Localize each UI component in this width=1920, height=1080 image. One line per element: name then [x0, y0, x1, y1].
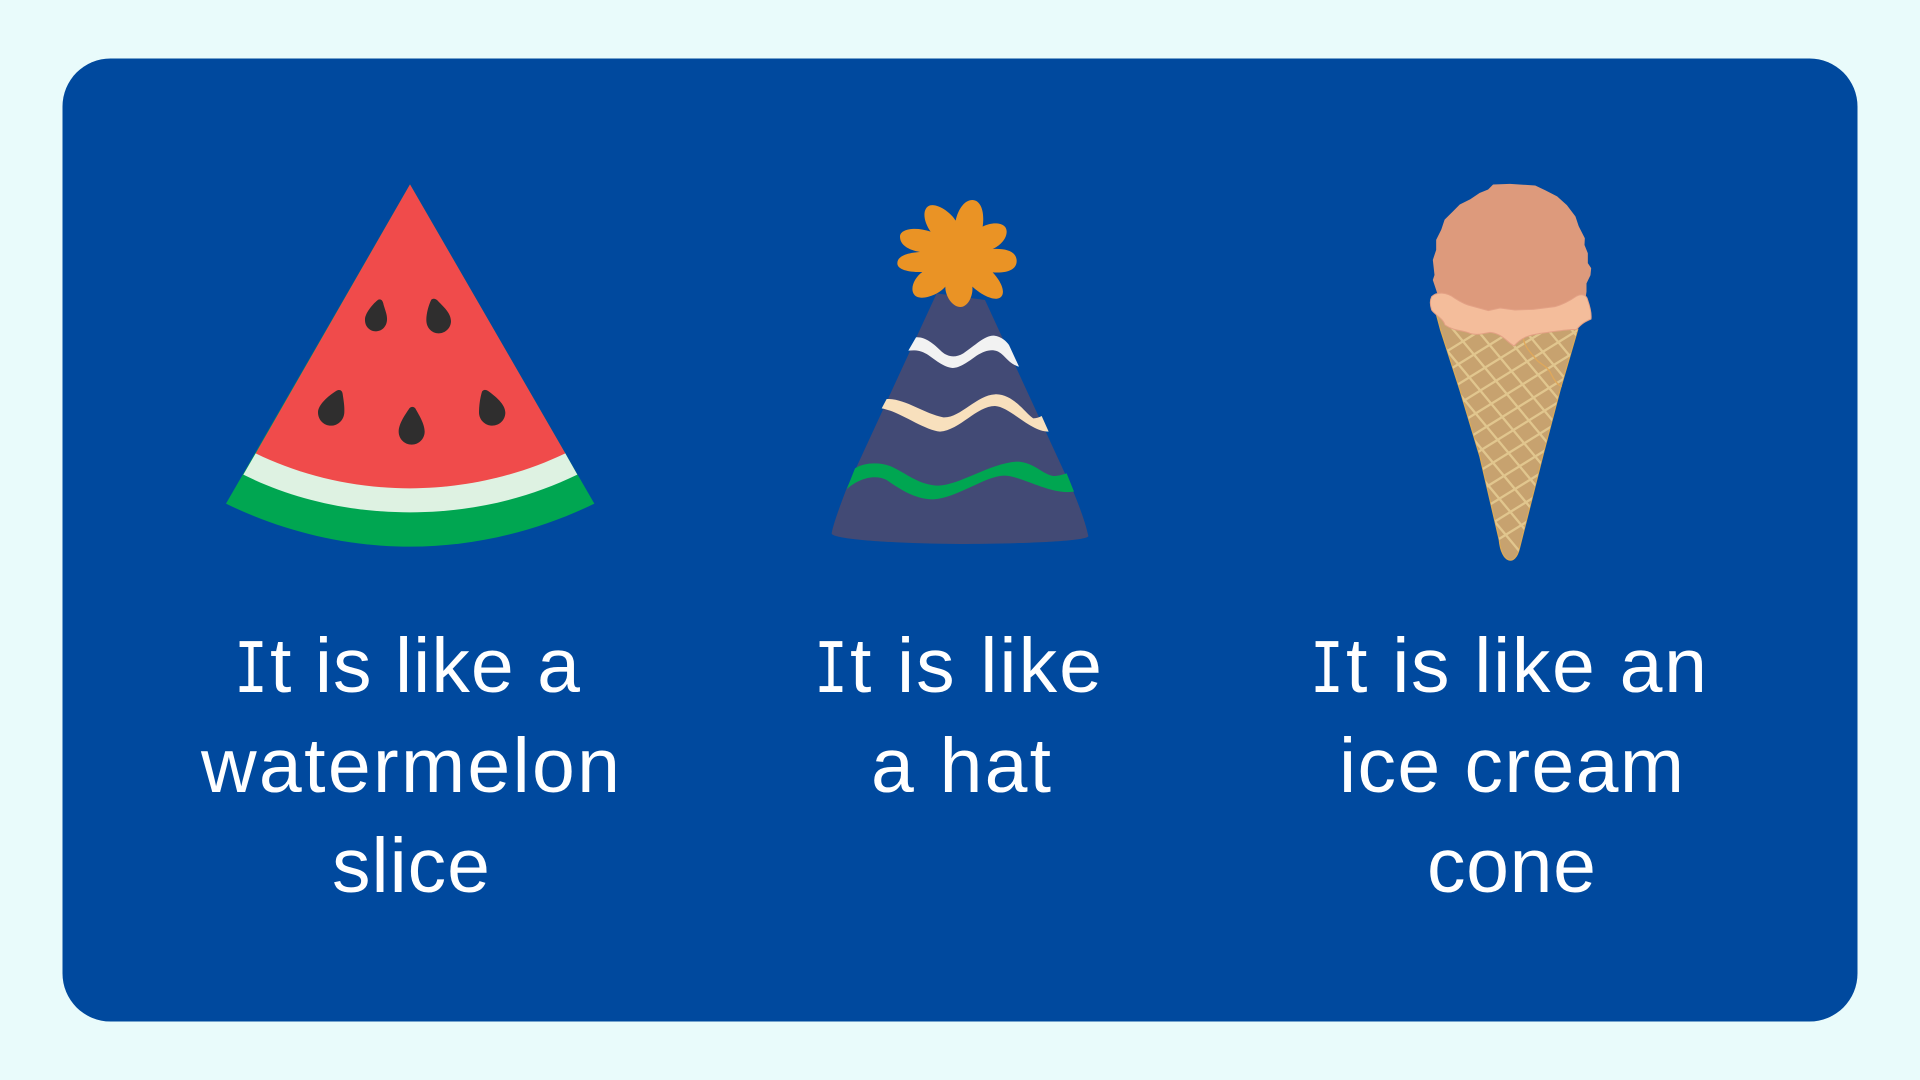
- text: watermelon caption: [200, 623, 620, 909]
- text: hat caption: a hat: [871, 723, 1051, 809]
- text: ice cream caption: ice cream: [1339, 723, 1684, 809]
- text: watermelon caption: slice: [332, 823, 490, 909]
- text: watermelon caption: I: [234, 629, 268, 716]
- text: ice cream caption: cone: [1427, 823, 1596, 909]
- icon: party hat: [832, 200, 1088, 544]
- text: ice cream caption: t is like an: [1346, 623, 1707, 709]
- text: hat caption: [814, 623, 1102, 809]
- text: watermelon caption: watermelon: [200, 723, 620, 809]
- text: hat caption: I: [814, 629, 848, 716]
- text: watermelon caption: t is like a: [270, 623, 580, 709]
- text: ice cream caption: I: [1310, 629, 1344, 716]
- seeds: [318, 299, 505, 445]
- icon: watermelon slice: [226, 184, 594, 547]
- text: ice cream caption: [1310, 623, 1707, 909]
- text: hat caption: t is like: [850, 623, 1102, 709]
- icon: ice cream cone: [1430, 184, 1592, 561]
